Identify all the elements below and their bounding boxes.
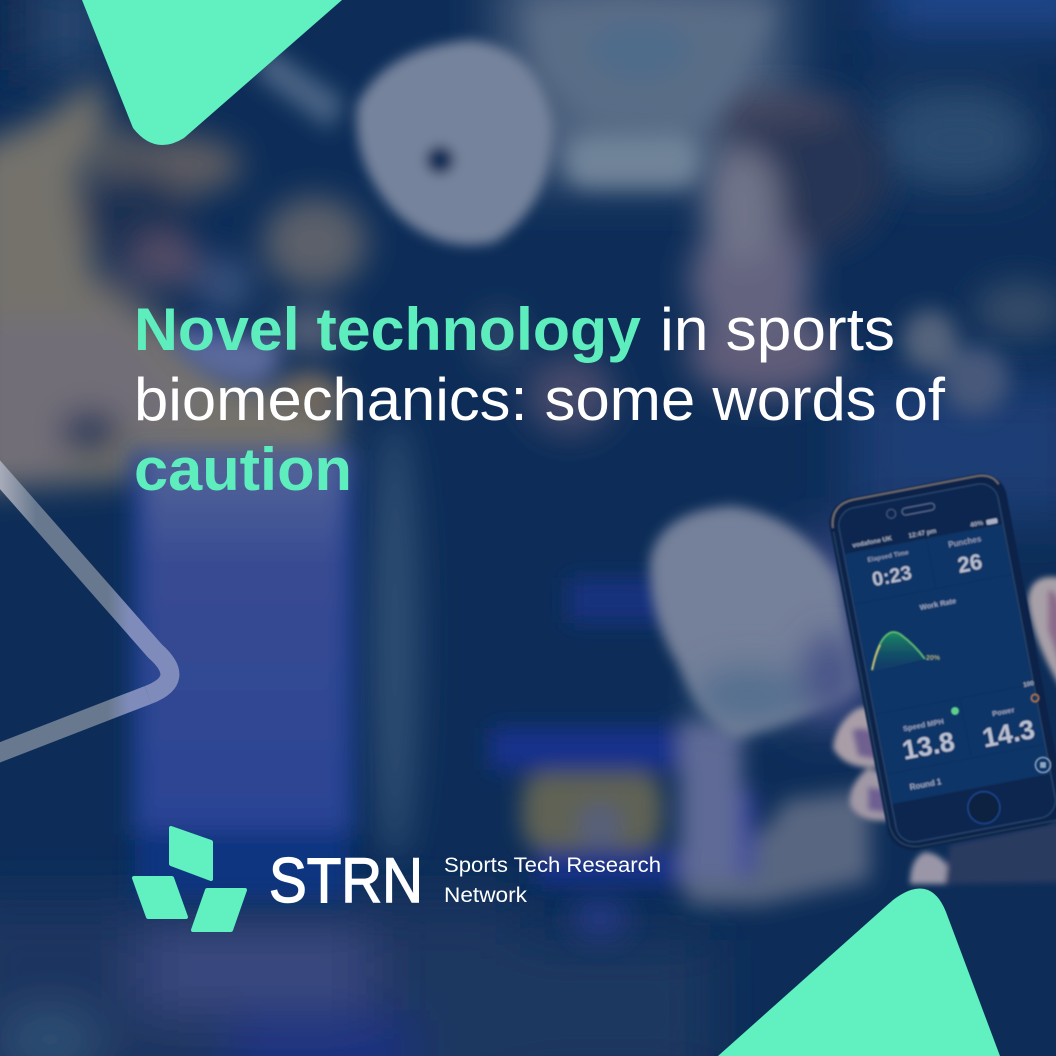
punching pad, lower [650,506,856,738]
smartphone photo [825,469,1056,884]
phone screen: 14.3 [980,714,1037,753]
pad neck [680,720,742,880]
status bar: vodafone UK [852,535,893,550]
right figure hair [712,97,888,253]
camera [886,509,896,519]
glove under title [165,333,281,385]
phone screen: 12:47 pm [908,528,937,540]
wordmark: STRN [269,846,423,916]
STRN logo [134,828,661,930]
status dots [951,694,1050,772]
title: Novel technology [134,296,642,363]
phone screen: 0:23 [870,562,914,591]
left figure arm and torso [0,78,340,490]
round label: Round 1 [909,777,943,792]
punching pad, top [356,40,552,245]
lower bands and bag [568,578,668,623]
work rate chart [872,632,941,672]
logo mark [134,828,245,930]
title: in sports [660,296,895,363]
phone screen: 26 [956,549,984,578]
earpiece [901,503,935,516]
speed readout: Speed MPH [902,717,944,733]
organisation name: Sports Tech Research [444,854,661,877]
pale blobs right [902,310,958,370]
outlined triangle, left [0,452,170,760]
organisation name: Network [444,884,528,907]
hand and fingers [833,577,1056,884]
work rate chart: 20% [926,655,941,662]
home button [965,789,1003,826]
phone screen [838,489,1056,840]
mint triangle, bottom right [718,888,1000,1056]
work rate label: Work Rate [919,596,957,612]
phone body [825,469,1056,855]
scale label: 100 [1023,680,1035,689]
lower right pad shading source [572,900,628,936]
forearm lower right [680,790,870,905]
title: caution [134,436,352,503]
organisation name [444,854,661,907]
punches: Punches [948,534,983,550]
blue panel [131,450,355,835]
power readout: Power [991,705,1015,718]
elapsed time: Elapsed Time [867,549,910,564]
phone screen: 13.8 [900,726,957,766]
mint triangle, top left [82,0,342,145]
streak behind [255,45,345,130]
top right grey cluster [530,0,775,130]
title: biomechanics: some words of [134,366,945,433]
phone screen: 40% [970,520,984,529]
